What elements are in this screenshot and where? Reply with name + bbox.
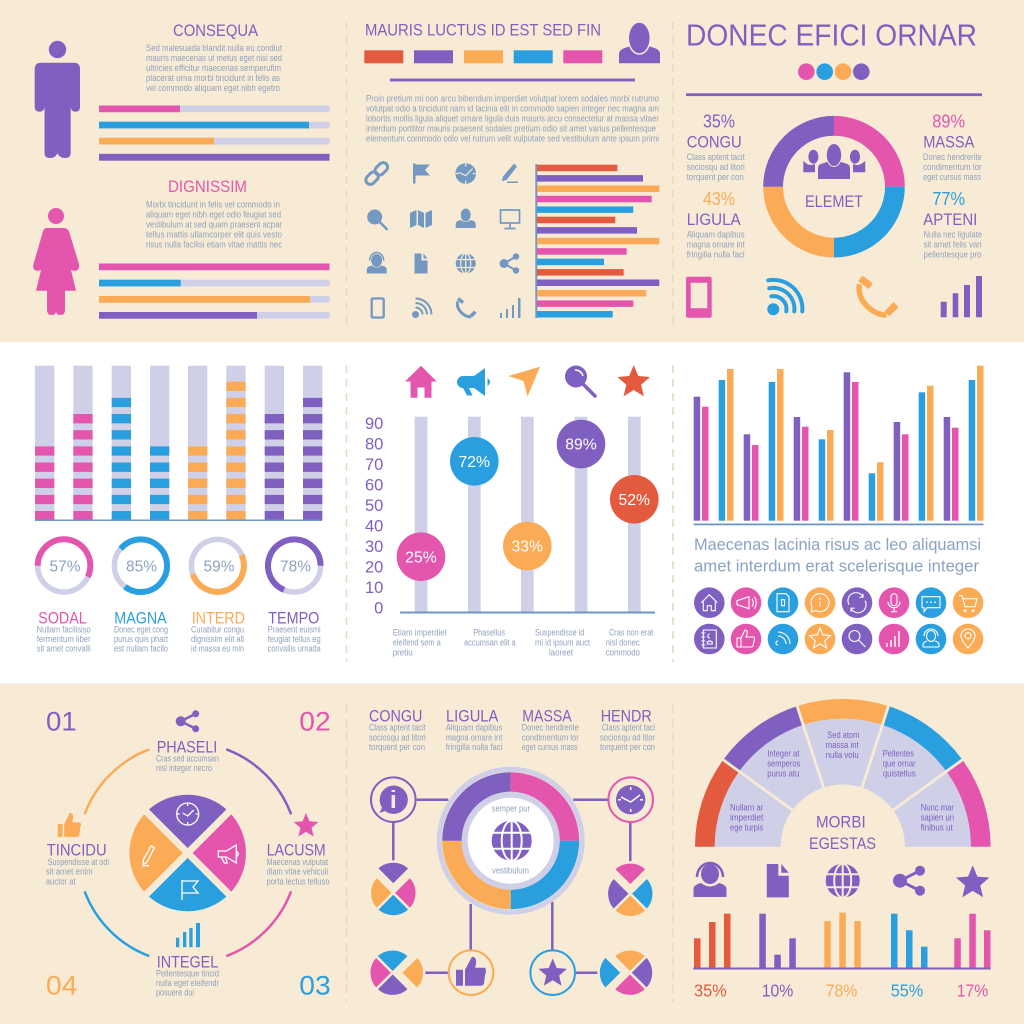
label: sodal: SODAL <box>38 608 87 627</box>
stat: massa: Donec hendrerite <box>923 152 982 162</box>
stat: apteni: Nulla nec ligulate <box>924 229 982 239</box>
icon: mobile pink <box>686 277 712 318</box>
stat: massa: MASSA <box>923 133 975 152</box>
icon: map <box>410 210 432 228</box>
column: congu: sociosqu ad litori <box>369 732 426 742</box>
column: hendr <box>600 706 655 752</box>
percent labels <box>694 981 988 1001</box>
segment text: finibus ut <box>921 822 953 832</box>
captions: eleifend sem a <box>393 638 441 648</box>
label: elemet: ELEMET <box>805 192 863 211</box>
step: phaseli: nisl integer necro <box>156 763 212 773</box>
icon: globe <box>492 821 532 861</box>
segment text: nulla volu <box>826 750 859 760</box>
bubble: 89%: 89% <box>565 437 597 454</box>
captions: mi id ipsum auct <box>535 638 590 648</box>
stat: ligula: Aliquam dapibus <box>687 229 745 239</box>
captions: commodo <box>606 647 640 657</box>
percent labels: 10% <box>762 981 793 1001</box>
heading: consequa: CONSEQUA <box>173 21 259 40</box>
step: integel: INTEGEL <box>157 952 218 971</box>
label: tempo: convallis urnada <box>268 644 321 654</box>
stat: massa <box>923 112 982 182</box>
panel: paired bars and icon buttons <box>694 366 984 654</box>
bar group: dignissim progress <box>99 264 330 319</box>
icon: team <box>803 144 865 179</box>
icon: thumb <box>58 813 81 837</box>
stat: apteni: APTENI <box>923 210 977 229</box>
step numbers: 02 <box>299 707 331 737</box>
text block: mauris: interdum porttitor mauris praesent sodales pretium odio sit amet varius pellentesque <box>366 124 656 134</box>
icon: user <box>619 22 660 63</box>
cycle arcs <box>85 750 291 956</box>
central donut: vestibulum <box>492 865 529 875</box>
icon: signal <box>176 923 200 947</box>
column: massa: condimentum lor <box>522 732 579 742</box>
step: integel: nulla eget eleifendr <box>156 978 219 988</box>
stat: massa: 89% <box>932 112 965 132</box>
segment text: semperos <box>767 759 801 769</box>
mini bar chart <box>693 913 991 970</box>
segment text: ege turpis <box>730 822 764 832</box>
bubble: 72%: 72% <box>458 454 490 471</box>
text block: dignissim: tellus mattis ullamcorper elit quis vesto <box>146 230 282 240</box>
segment text: imperdiet <box>730 812 764 822</box>
text block: dignissim: aliquam eget nibh eget odio feugiat sed <box>146 210 281 220</box>
column: ligula: fringilla nulla faci <box>446 742 502 752</box>
gauge: 85% <box>114 539 167 592</box>
label: magna: est nullam facilo <box>114 644 168 654</box>
heading: morbi egestas: MORBI <box>816 812 866 831</box>
step numbers: 04 <box>46 971 77 1001</box>
captions: nisl donec <box>606 638 640 648</box>
heading: dignissim: DIGNISSIM <box>168 177 247 196</box>
donut chart <box>773 126 895 248</box>
stat: congu: Class aptent tacit <box>687 152 745 162</box>
node: star <box>530 950 575 995</box>
column: ligula <box>446 706 503 752</box>
stat: congu: CONGU <box>687 133 742 152</box>
y axis labels <box>365 415 383 617</box>
percent labels: 78% <box>826 981 857 1001</box>
y axis labels: 40 <box>365 518 383 536</box>
label: interd: Curabitur congu <box>191 624 244 634</box>
segment text: Nunc mar <box>921 802 954 812</box>
step: lacusm: LACUSM <box>267 841 326 860</box>
segment text: purus atu <box>767 769 799 779</box>
column: ligula: Aliquam dapibus <box>446 723 503 733</box>
text block: mauris: lobortis mollis ligula aliquet ornare ligula duis mauris arcu consectetur at massa vitaer <box>366 114 659 124</box>
column: hendr: Class aptent taci <box>602 723 655 733</box>
text block: dignissim: vestibulum at sed quam praesent acpar <box>146 220 282 230</box>
small pie: top-left <box>370 862 417 916</box>
connector lines <box>393 800 630 973</box>
heading: morbi egestas <box>809 812 876 853</box>
icon: phone orange <box>858 275 899 316</box>
stat: massa: eget cursus mass <box>923 172 982 182</box>
icon: arrow <box>508 367 540 397</box>
step: tincidu: sit amet enim <box>46 867 93 877</box>
stat: congu: 35% <box>703 112 735 132</box>
gauge: 59%: 59% <box>204 559 234 576</box>
y axis labels: 10 <box>365 579 383 597</box>
heading: mauris: MAURIS LUCTUS ID EST SED FIN <box>365 21 601 40</box>
column: hendr: torquent per con <box>600 742 655 752</box>
stat: apteni: pellentesque pro <box>924 249 982 259</box>
step: integel: posuere dui <box>156 988 194 998</box>
panel: striped columns and gauges <box>35 366 322 654</box>
column: hendr: sociosqu ad litor <box>600 732 655 742</box>
gauge: 85%: 85% <box>126 559 157 576</box>
icon: support <box>367 252 387 274</box>
step: integel <box>156 952 219 998</box>
column: congu: CONGU <box>369 706 422 725</box>
column: congu: Class aptent tacit <box>369 723 426 733</box>
panel: gender comparison <box>33 21 330 319</box>
small pie: bottom-left <box>369 949 424 996</box>
segment text: Integer at <box>767 749 800 759</box>
y axis labels: 20 <box>365 558 383 576</box>
label: interd: id massa eu min <box>191 644 244 654</box>
column: massa: Donec hendrerite <box>522 723 579 733</box>
text block: consequa <box>146 43 282 93</box>
icon: person <box>456 208 476 228</box>
segment text: Pellentes <box>883 749 915 759</box>
segment text: sapien un <box>921 812 954 822</box>
bubble: 72% <box>450 437 499 486</box>
colour swatches <box>364 50 602 63</box>
icon: monitor <box>500 210 520 228</box>
label: tempo: Praesent euismi <box>268 624 321 634</box>
bubble: 52% <box>610 475 659 524</box>
step: phaseli <box>156 737 219 773</box>
semicircle chart <box>695 699 991 847</box>
step: tincidu <box>46 841 109 886</box>
icon: globe <box>456 254 476 274</box>
node: thumb <box>449 950 493 995</box>
gauge: 78%: 78% <box>280 559 311 576</box>
step numbers: 03 <box>299 971 331 1001</box>
icon: globe <box>826 864 860 898</box>
columns and axis <box>400 417 655 614</box>
gauge: 59% <box>191 539 244 592</box>
text block: dignissim <box>146 200 283 250</box>
icon: megaphone <box>457 368 490 396</box>
icon: star <box>956 865 989 897</box>
icon: flag <box>413 164 430 184</box>
text block: consequa: Sed malesuada blandit nulla eu condiut <box>146 43 282 53</box>
bubble: 52%: 52% <box>618 492 650 509</box>
colour dots <box>798 63 870 80</box>
percent labels: 35% <box>694 981 727 1001</box>
stat: congu <box>687 112 745 182</box>
step: integel: Pellentesque tincid <box>156 968 219 978</box>
column: congu <box>369 706 426 752</box>
icon: pen <box>502 164 518 183</box>
text block: mauris <box>366 94 659 144</box>
bar group: consequa progress <box>99 106 330 161</box>
label: magna: Donec eget cong <box>114 624 168 634</box>
icon buttons <box>694 587 983 654</box>
segment text: massa int <box>826 740 859 750</box>
percent labels: 55% <box>891 981 923 1001</box>
label: tempo <box>268 608 321 654</box>
label: magna: purus quis phart <box>114 634 168 644</box>
captions: accumsan elit a <box>464 638 516 648</box>
step: phaseli: PHASELI <box>157 737 217 756</box>
bubble: 89% <box>557 420 605 468</box>
y axis labels: 90 <box>365 415 383 433</box>
stat: ligula: magna ornare int <box>687 239 745 249</box>
column: massa: eget cursus mass <box>522 742 578 752</box>
icon: woman <box>33 208 79 315</box>
label: sodal: sit amet convalli <box>37 644 91 654</box>
four-part pie <box>129 795 246 911</box>
label: sodal: Nullam facilisiso <box>37 624 91 634</box>
icon: star <box>294 813 318 837</box>
segment text <box>730 730 954 832</box>
step: tincidu: auctor at <box>46 876 76 886</box>
icon: signal <box>500 298 520 318</box>
bubble: 25% <box>397 532 445 581</box>
node: info <box>371 777 416 822</box>
text block: consequa: vel commodo aliquam eget nibh egetro <box>146 83 280 93</box>
stat: congu: torquent per con <box>687 172 744 182</box>
y axis labels: 50 <box>365 497 383 515</box>
label: magna: MAGNA <box>114 608 167 627</box>
striped column chart <box>35 366 322 521</box>
label: interd: dignissim elit all <box>191 634 244 644</box>
captions: Etiam imperdiet <box>393 628 447 638</box>
gauge: 57%: 57% <box>50 559 80 576</box>
text block: consequa: placerat urna morbi tincidunt in felis as <box>146 73 281 83</box>
stat: ligula: fringilla nulla faci <box>687 249 745 259</box>
text block: mauris: Proin pretium mi non arcu bibendum imperdiet volutpat lorem sodales morbi rutrumo <box>366 94 659 104</box>
y axis labels: 70 <box>365 456 383 474</box>
segment text: Sed atom <box>827 730 859 740</box>
icon: document <box>414 254 428 274</box>
column: ligula: LIGULA <box>446 706 499 725</box>
captions: Cras non erat <box>609 628 654 638</box>
icon: share <box>500 253 519 274</box>
label: interd: INTERD <box>192 608 245 627</box>
stat: ligula: 43% <box>703 189 735 209</box>
text block: consequa: ultricies efficitur maecenas semperufim <box>146 63 281 73</box>
icon: support <box>694 863 726 897</box>
icon: share <box>893 866 925 896</box>
horizontal bar chart <box>535 164 659 318</box>
paired bar chart <box>694 366 984 525</box>
label: sodal <box>37 608 91 654</box>
stat: ligula: LIGULA <box>687 210 741 229</box>
text block: consequa: mauris maecenas ut metus eget nisi sed <box>146 53 282 63</box>
label: sodal: fermentum liber <box>37 634 91 644</box>
label: tempo: TEMPO <box>268 608 319 627</box>
label: magna <box>114 608 168 654</box>
small pie: top-right <box>607 862 654 917</box>
heading: donec: DONEC EFICI ORNAR <box>686 18 977 53</box>
text block: dignissim: Morbi tincidunt in felis vel commodo in <box>146 200 280 210</box>
step: lacusm: Maecenas vulputat <box>266 857 328 867</box>
heading: morbi egestas: EGESTAS <box>809 834 876 853</box>
icon: phone <box>457 297 477 318</box>
bubble: 33% <box>503 522 552 570</box>
text block: maecenas: Maecenas lacinia risus ac leo aliquamsi <box>694 535 981 554</box>
bubble: 33%: 33% <box>512 539 543 556</box>
segment text: quistellus <box>883 769 916 779</box>
icon grid <box>364 161 520 318</box>
central donut: semper pur <box>492 804 530 814</box>
panel: bubble chart <box>365 365 659 657</box>
step: tincidu: Suspendisse at odi <box>48 857 109 867</box>
step: tincidu: TINCIDU <box>47 841 107 860</box>
small pie: bottom-right <box>599 949 653 996</box>
y axis labels: 30 <box>365 538 383 556</box>
y axis labels: 80 <box>365 436 383 454</box>
stat: congu: sociosqu ad litori <box>687 162 745 172</box>
column: congu: torquent per con <box>369 742 425 752</box>
icon: search <box>367 210 387 229</box>
segment text: Nullam ar <box>730 802 763 812</box>
text block: dignissim: risus nulla facilisi etiam vitae mattis nec <box>146 240 283 250</box>
panel: cycle diagram <box>46 707 331 1001</box>
bubble: 25%: 25% <box>405 550 437 566</box>
step: phaseli: Cras sed accumsan <box>156 753 219 763</box>
panel: donec donut <box>686 18 982 318</box>
icon: link <box>364 161 389 186</box>
text block: maecenas <box>694 535 981 576</box>
icon: star <box>617 365 650 396</box>
gauge: 57% <box>38 539 90 592</box>
segment text: que ornar <box>883 759 916 769</box>
text block: mauris: elementum commodo odio vel rutrum velit vulputate sed vestibulum ante ipsum primi <box>366 134 659 144</box>
icon: house <box>405 366 437 398</box>
icon: man <box>35 41 80 158</box>
icon: wifi <box>412 298 432 318</box>
step: lacusm <box>266 841 330 886</box>
icon: magnifier <box>565 366 595 396</box>
label: tempo: feugiat tellus eg <box>268 634 321 644</box>
icon: mobile <box>372 298 384 318</box>
gauge: 78% <box>268 539 321 592</box>
percent labels: 17% <box>957 981 988 1001</box>
captions: Suspendisse id <box>535 628 584 638</box>
central donut <box>437 767 585 915</box>
text block: maecenas: amet interdum erat scelerisque integer <box>694 557 979 576</box>
node: clock <box>608 777 653 822</box>
y axis labels: 0 <box>374 599 383 617</box>
panel: mauris icons and bars <box>364 21 660 318</box>
panel: network diagram <box>369 706 655 996</box>
y axis labels: 60 <box>365 476 383 494</box>
captions: laoreet <box>549 647 573 657</box>
step numbers <box>46 707 331 1001</box>
step: lacusm: diam vitae vehiculi <box>266 867 328 877</box>
column: massa: MASSA <box>522 706 572 725</box>
column: massa <box>522 706 579 752</box>
stat: ligula <box>687 189 745 259</box>
label: interd <box>191 608 245 654</box>
captions: pretiu <box>393 647 413 657</box>
column: hendr: HENDR <box>601 706 652 725</box>
stat: apteni <box>923 189 982 259</box>
icon: share <box>176 710 199 732</box>
stat: apteni: 77% <box>932 189 965 209</box>
column: ligula: magna ornare int <box>446 732 503 742</box>
text block: mauris: volutpat odio a tincidunt nam id lacinia elit in commodo sapien integer nec magna am <box>366 104 659 114</box>
icon: signal purple <box>941 276 982 317</box>
step: lacusm: porta lectus telluso <box>266 876 330 886</box>
captions <box>393 628 654 657</box>
captions: Phasellus <box>473 628 505 638</box>
step numbers: 01 <box>46 707 77 737</box>
icon: clock <box>455 163 476 184</box>
icon: wifi blue <box>767 280 802 315</box>
panel: semicircle and mini bars <box>693 699 991 1001</box>
icon: document <box>767 864 789 897</box>
stat: apteni: sit amet felis vari <box>924 239 982 249</box>
stat: massa: condimentum lor <box>923 162 982 172</box>
